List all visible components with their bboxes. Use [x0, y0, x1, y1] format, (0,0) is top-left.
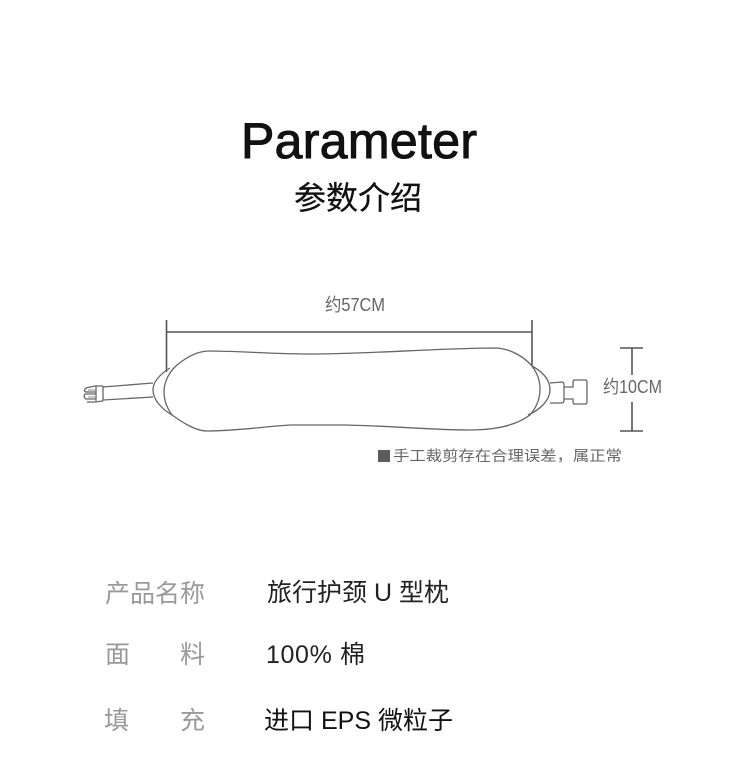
row label: 填充: 填 — [104, 707, 129, 735]
row value: 100% 棉: 100% 棉 — [266, 641, 365, 669]
subtitle: 参数介绍: 参数介绍 — [294, 180, 422, 216]
width dimension label: 约57CM — [325, 295, 385, 315]
right crescent — [528, 366, 550, 415]
row label: 产品名称: 产品名称 — [105, 580, 205, 608]
note square icon — [378, 450, 390, 462]
row label: 填充 — [104, 707, 205, 735]
left crescent — [153, 368, 172, 415]
row label: 面料 — [105, 641, 205, 669]
row label: 面料: 面 — [105, 641, 130, 669]
title: Parameter: Parameter — [241, 113, 477, 169]
left strap — [103, 383, 153, 401]
left buckle — [84, 386, 103, 402]
pillow diagram — [84, 348, 587, 431]
row value: 进口 EPS 微粒子: 进口 EPS 微粒子 — [264, 707, 453, 735]
height dimension label: 约10CM — [603, 377, 662, 397]
row value: 旅行护颈 U 型枕: 旅行护颈 U 型枕 — [267, 579, 449, 607]
row label: 面料: 料 — [180, 641, 205, 669]
row label: 填充: 充 — [180, 707, 205, 735]
note text: 手工裁剪存在合理误差，属正常 — [393, 447, 622, 465]
height dimension bracket — [620, 348, 643, 431]
right buckle — [550, 382, 564, 403]
pillow body — [164, 348, 540, 431]
width dimension bracket — [166, 320, 532, 372]
